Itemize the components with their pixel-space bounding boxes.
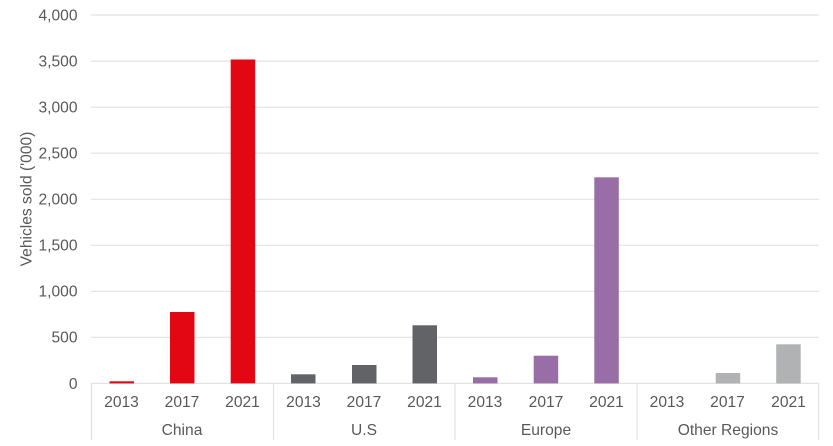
year labels — [104, 394, 806, 411]
bars: U.S — [291, 325, 437, 383]
y axis labels: 500 — [51, 330, 78, 346]
y axis labels: 2,500 — [38, 146, 78, 162]
y axis labels: 2,000 — [38, 192, 78, 208]
year labels: 2017 — [710, 394, 745, 411]
y axis labels: 1,000 — [38, 284, 78, 300]
y axis labels: 3,500 — [38, 54, 78, 70]
y axis title: Vehicles sold ('000) — [18, 132, 36, 266]
bars: China — [110, 60, 255, 383]
region labels — [162, 422, 778, 439]
year labels: 2017 — [165, 394, 199, 411]
year labels: 2013 — [468, 394, 502, 411]
y axis labels: 1,500 — [38, 238, 78, 254]
region labels: Europe — [521, 422, 571, 439]
y axis labels — [38, 8, 78, 393]
year labels: 2021 — [771, 394, 806, 411]
bars: Europe — [473, 177, 619, 383]
y axis labels: 4,000 — [38, 8, 78, 24]
region labels: Other Regions — [678, 422, 778, 439]
y axis labels: 0 — [69, 376, 78, 393]
y axis labels: 3,000 — [38, 100, 78, 116]
year labels: 2013 — [650, 394, 684, 411]
year labels: 2021 — [589, 394, 624, 411]
year labels: 2021 — [407, 394, 442, 411]
year labels: 2017 — [529, 394, 563, 411]
region labels: China — [162, 422, 203, 439]
year labels: 2021 — [225, 394, 260, 411]
region labels: U.S — [351, 422, 377, 439]
year labels: 2017 — [347, 394, 381, 411]
year labels: 2013 — [104, 394, 139, 411]
year labels: 2013 — [286, 394, 321, 411]
bars: Other Regions — [716, 344, 801, 383]
